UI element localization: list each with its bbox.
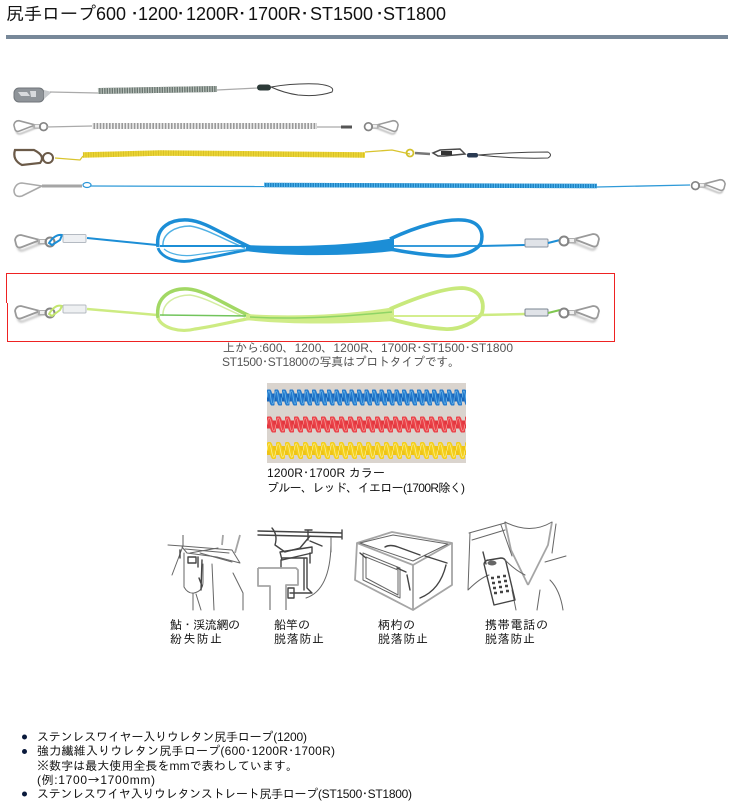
use caption: phone: 脱落防止 (485, 632, 535, 646)
product list: 強力繊維入りウレタン尻手ロープ(600・1200R・1700R) (37, 744, 335, 758)
blue rope bundle (246, 238, 394, 255)
page title: 600 (96, 4, 126, 24)
rope 1200R yellow (14, 149, 551, 165)
use caption: ladle: 脱落防止 (378, 632, 428, 646)
use caption: net: 鮎・渓流網の (170, 618, 240, 632)
use caption: net: 紛失防止 (170, 632, 222, 646)
page title: ・ (126, 4, 144, 24)
photo caption: 上から:600、1200、1200R、1700R・ST1500・ST1800 (223, 341, 513, 355)
use caption: ladle: 柄杓の (378, 618, 415, 632)
colour caption: 1200R・1700R カラー (267, 466, 385, 480)
photo caption (222, 341, 513, 369)
title rule (6, 35, 728, 39)
rope 1200 (14, 121, 398, 134)
colour swatch photo (267, 383, 466, 463)
page title: ・ (172, 4, 190, 24)
product list: ※数字は最大使用全長をmmで表わしています。 (37, 759, 298, 773)
page title: 1200R (186, 4, 239, 24)
illustration: rod on boat (258, 528, 342, 610)
illustration: bucket (355, 532, 452, 610)
illustration: fishing net at waist (168, 535, 243, 610)
product list (22, 730, 412, 801)
colour caption (267, 466, 465, 495)
rope ST1500 blue (15, 220, 599, 261)
illustration: mobile phone (468, 522, 566, 610)
green rope bundle (246, 307, 394, 324)
product list: ステンレスワイヤ入りウレタンストレート尻手ロープ(ST1500・ST1800) (37, 787, 412, 801)
product list: (例:1700→1700mm) (37, 773, 155, 787)
colour caption: ブルー、レッド、イエロー(1700R除く) (267, 481, 465, 495)
page title: 尻手ロープ (6, 4, 96, 24)
page title: 1700R (248, 4, 301, 24)
use caption: phone: 携帯電話の (485, 618, 548, 632)
rope ST1800 green (15, 288, 599, 330)
use caption: phone (485, 618, 548, 646)
rope 600 (14, 84, 333, 102)
use caption: rod (274, 618, 324, 646)
page title: 1200 (138, 4, 178, 24)
use caption: net (170, 618, 240, 646)
use caption: ladle (378, 618, 428, 646)
page title: ・ (370, 4, 388, 24)
use caption: rod: 脱落防止 (274, 632, 324, 646)
page title: ・ (233, 4, 251, 24)
page title: ST1800 (383, 4, 446, 24)
product list: ステンレスワイヤー入りウレタン尻手ロープ(1200) (37, 730, 307, 744)
page title: ST1500 (310, 4, 373, 24)
highlight box (6, 274, 614, 342)
use caption: rod: 船竿の (274, 618, 310, 632)
rope 1700R blue (14, 180, 725, 196)
photo caption: ST1500・ST1800の写真はプロトタイプです。 (222, 355, 460, 369)
page title: ・ (296, 4, 314, 24)
